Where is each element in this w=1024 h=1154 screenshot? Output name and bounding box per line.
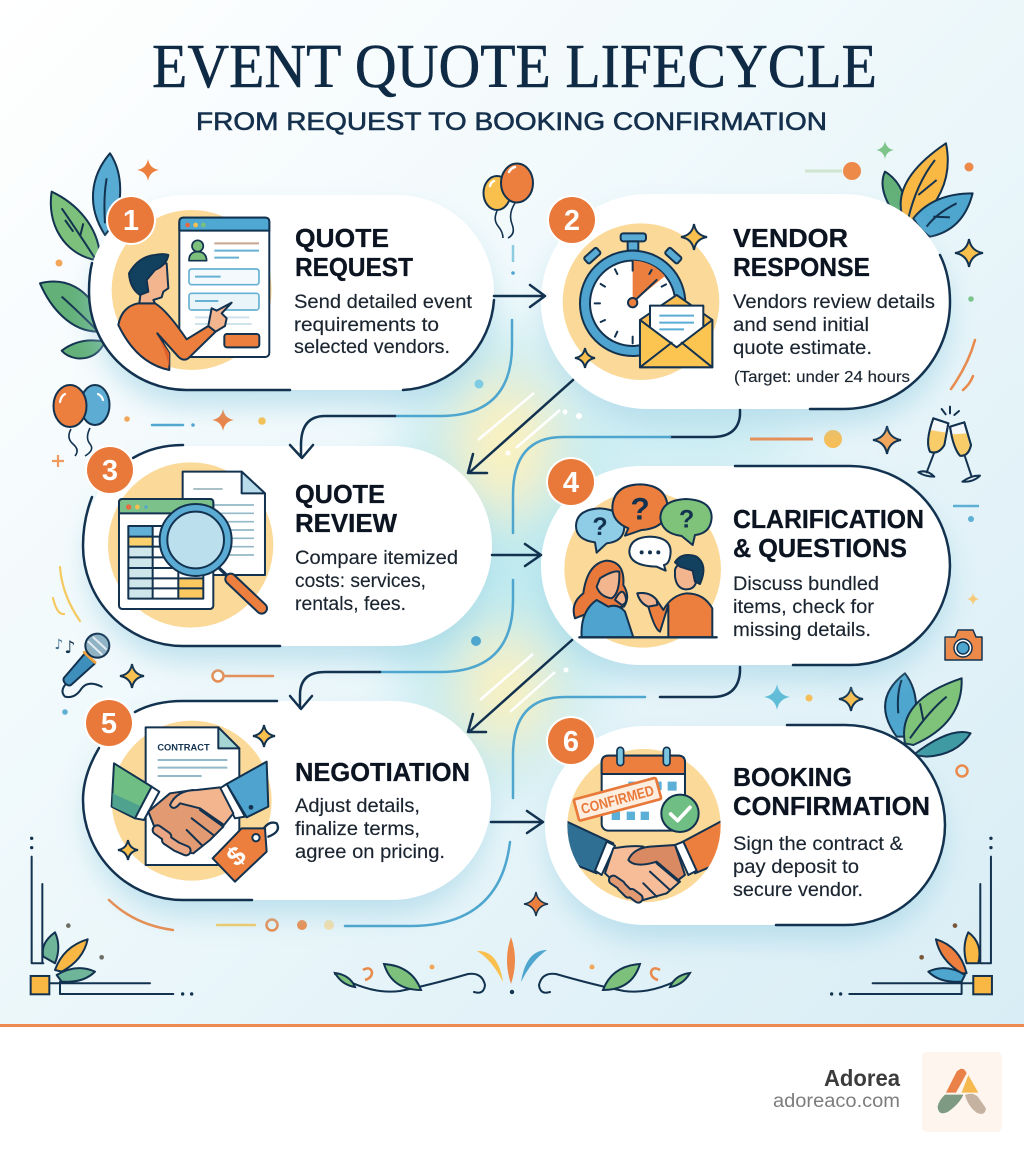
icon: camera	[945, 630, 982, 660]
text: step 2: VENDOR	[733, 223, 848, 253]
icon: contract and handshake: $	[221, 840, 252, 872]
text: step 4: items, check for	[733, 597, 875, 618]
text: step 2	[733, 223, 935, 386]
icon: contract and handshake	[112, 721, 278, 882]
icon: calendar, stamp and handshake	[563, 747, 727, 902]
text: step 6: CONFIRMATION	[733, 791, 930, 821]
decoration: microphone: ♪	[54, 637, 63, 653]
text: step 1: selected vendors.	[294, 337, 450, 358]
number badge 4	[546, 457, 596, 507]
decoration: bottom center flourish	[335, 937, 690, 994]
number badge 4: 4	[563, 467, 579, 499]
number badge 6: 6	[563, 726, 579, 758]
text: step 4	[733, 504, 924, 641]
footer band	[0, 1024, 1024, 1154]
text: step 2: RESPONSE	[733, 252, 870, 282]
text: step 6	[733, 762, 930, 901]
decoration: microphone: ♪	[64, 638, 75, 658]
icon: couple with question bubbles: ?	[679, 505, 694, 533]
number badge 3: 3	[102, 455, 118, 487]
text: step 1: REQUEST	[295, 252, 413, 282]
decoration: left balloons	[54, 385, 110, 456]
icon: person filling web form	[112, 210, 272, 370]
text: step 2: (Target: under 24 hours	[734, 369, 910, 386]
icon: stopwatch and envelope	[563, 223, 719, 380]
decoration: balloons top center	[484, 164, 533, 275]
decoration: leaves above card 6	[885, 673, 971, 757]
decoration: line, dots and star left of card 3	[52, 409, 266, 621]
text: step 1	[294, 223, 473, 358]
footer brand text: adoreaco.com	[773, 1091, 900, 1112]
connector: step 4 curve to step 6	[513, 667, 740, 798]
footer brand text: Adorea	[824, 1065, 900, 1091]
number badge 6	[546, 716, 596, 766]
decoration: top right line, dots and leaves	[805, 141, 983, 390]
decoration: top left star and dot	[56, 159, 159, 266]
text: step 3: REVIEW	[295, 508, 397, 538]
text: step 3: rentals, fees.	[295, 594, 406, 615]
decoration: leaves top left	[40, 153, 120, 358]
connector: step 4 diagonal arrow to step 5	[468, 640, 572, 732]
text: step 4: & QUESTIONS	[733, 533, 907, 563]
text: step 4: CLARIFICATION	[733, 504, 924, 534]
background glow	[390, 330, 810, 790]
panel: step 3 quote review	[83, 445, 492, 646]
decoration: star and line above card 4	[750, 426, 901, 454]
text: step 6: pay deposit to	[733, 857, 859, 878]
number badge 5: 5	[101, 708, 117, 740]
text: step 5: agree on pricing.	[295, 842, 445, 863]
footer brand text	[773, 1065, 900, 1112]
text: step 5: Adjust details,	[295, 796, 420, 817]
icon: contract and handshake: CONTRACT	[157, 743, 210, 753]
icon: couple with question bubbles	[564, 484, 721, 648]
text: step 2: Vendors review details	[733, 292, 935, 313]
connector: step 2 curve to step 4	[513, 410, 740, 533]
connector: step 5 to 6 arrow and curve	[345, 811, 543, 926]
title: EVENT QUOTE LIFECYCLE	[152, 33, 877, 101]
icon: couple with question bubbles: ?	[592, 513, 608, 541]
icon: spreadsheet and magnifier	[108, 462, 273, 628]
connector: step 3 curve to step 5	[290, 580, 513, 709]
text: step 3: Compare itemized	[295, 548, 458, 569]
decoration: stars above card 6	[764, 684, 863, 711]
number badge 1	[106, 195, 156, 245]
text: step 6: secure vendor.	[733, 880, 863, 901]
decoration: champagne glasses	[918, 407, 980, 482]
icon: couple with question bubbles: ?	[630, 490, 650, 526]
text: step 2: quote estimate.	[733, 338, 872, 359]
text: step 4: Discuss bundled	[733, 574, 879, 595]
decoration: bottom left corner	[30, 837, 193, 996]
panel: step 4 clarification	[541, 466, 950, 665]
text: step 3: costs: services,	[295, 571, 426, 592]
decoration: ring right of card 6	[956, 766, 968, 776]
decoration: star and arc below card 5 and card 6	[62, 709, 548, 930]
number badge 2: 2	[564, 205, 580, 237]
text: step 2: and send initial	[733, 315, 869, 336]
number badge 1: 1	[123, 205, 139, 237]
number badge 2	[547, 195, 597, 245]
text: step 1: requirements to	[294, 315, 439, 336]
connector: step 3 to 4 arrow	[492, 544, 541, 566]
panel: step 1 quote request	[88, 195, 494, 390]
text: step 4: missing details.	[733, 620, 871, 641]
text: step 1: Send detailed event	[294, 292, 473, 313]
number badge 3	[85, 445, 135, 495]
panel: step 6 booking confirmation	[545, 725, 945, 925]
panel: step 5 negotiation	[83, 701, 491, 900]
number badge 5	[84, 698, 134, 748]
decoration: microphone	[54, 634, 109, 697]
icon: calendar, stamp and handshake: CONFIRMED	[579, 783, 656, 818]
text: step 6: BOOKING	[733, 762, 852, 792]
decoration: bottom right corner	[830, 837, 993, 996]
text: step 5	[295, 757, 470, 863]
subtitle: FROM REQUEST TO BOOKING CONFIRMATION	[196, 108, 827, 136]
decoration: right side dots	[953, 506, 979, 605]
text: step 3	[295, 479, 458, 615]
text: step 1: QUOTE	[295, 223, 389, 253]
panel: step 2 vendor response	[541, 194, 950, 409]
text: step 5: NEGOTIATION	[295, 757, 470, 787]
footer logo	[922, 1052, 1002, 1132]
connector: step 1 curve down to step 3	[290, 320, 512, 458]
card shadows	[87, 212, 950, 940]
text: step 5: finalize terms,	[295, 819, 420, 840]
decoration: star and line under card 3	[120, 664, 273, 688]
text: step 6: Sign the contract &	[733, 834, 903, 855]
connector: step 2 diagonal arrow to step 3	[468, 380, 582, 473]
connector: step 1 to 2 arrow	[494, 285, 545, 307]
text: step 3: QUOTE	[295, 479, 385, 509]
